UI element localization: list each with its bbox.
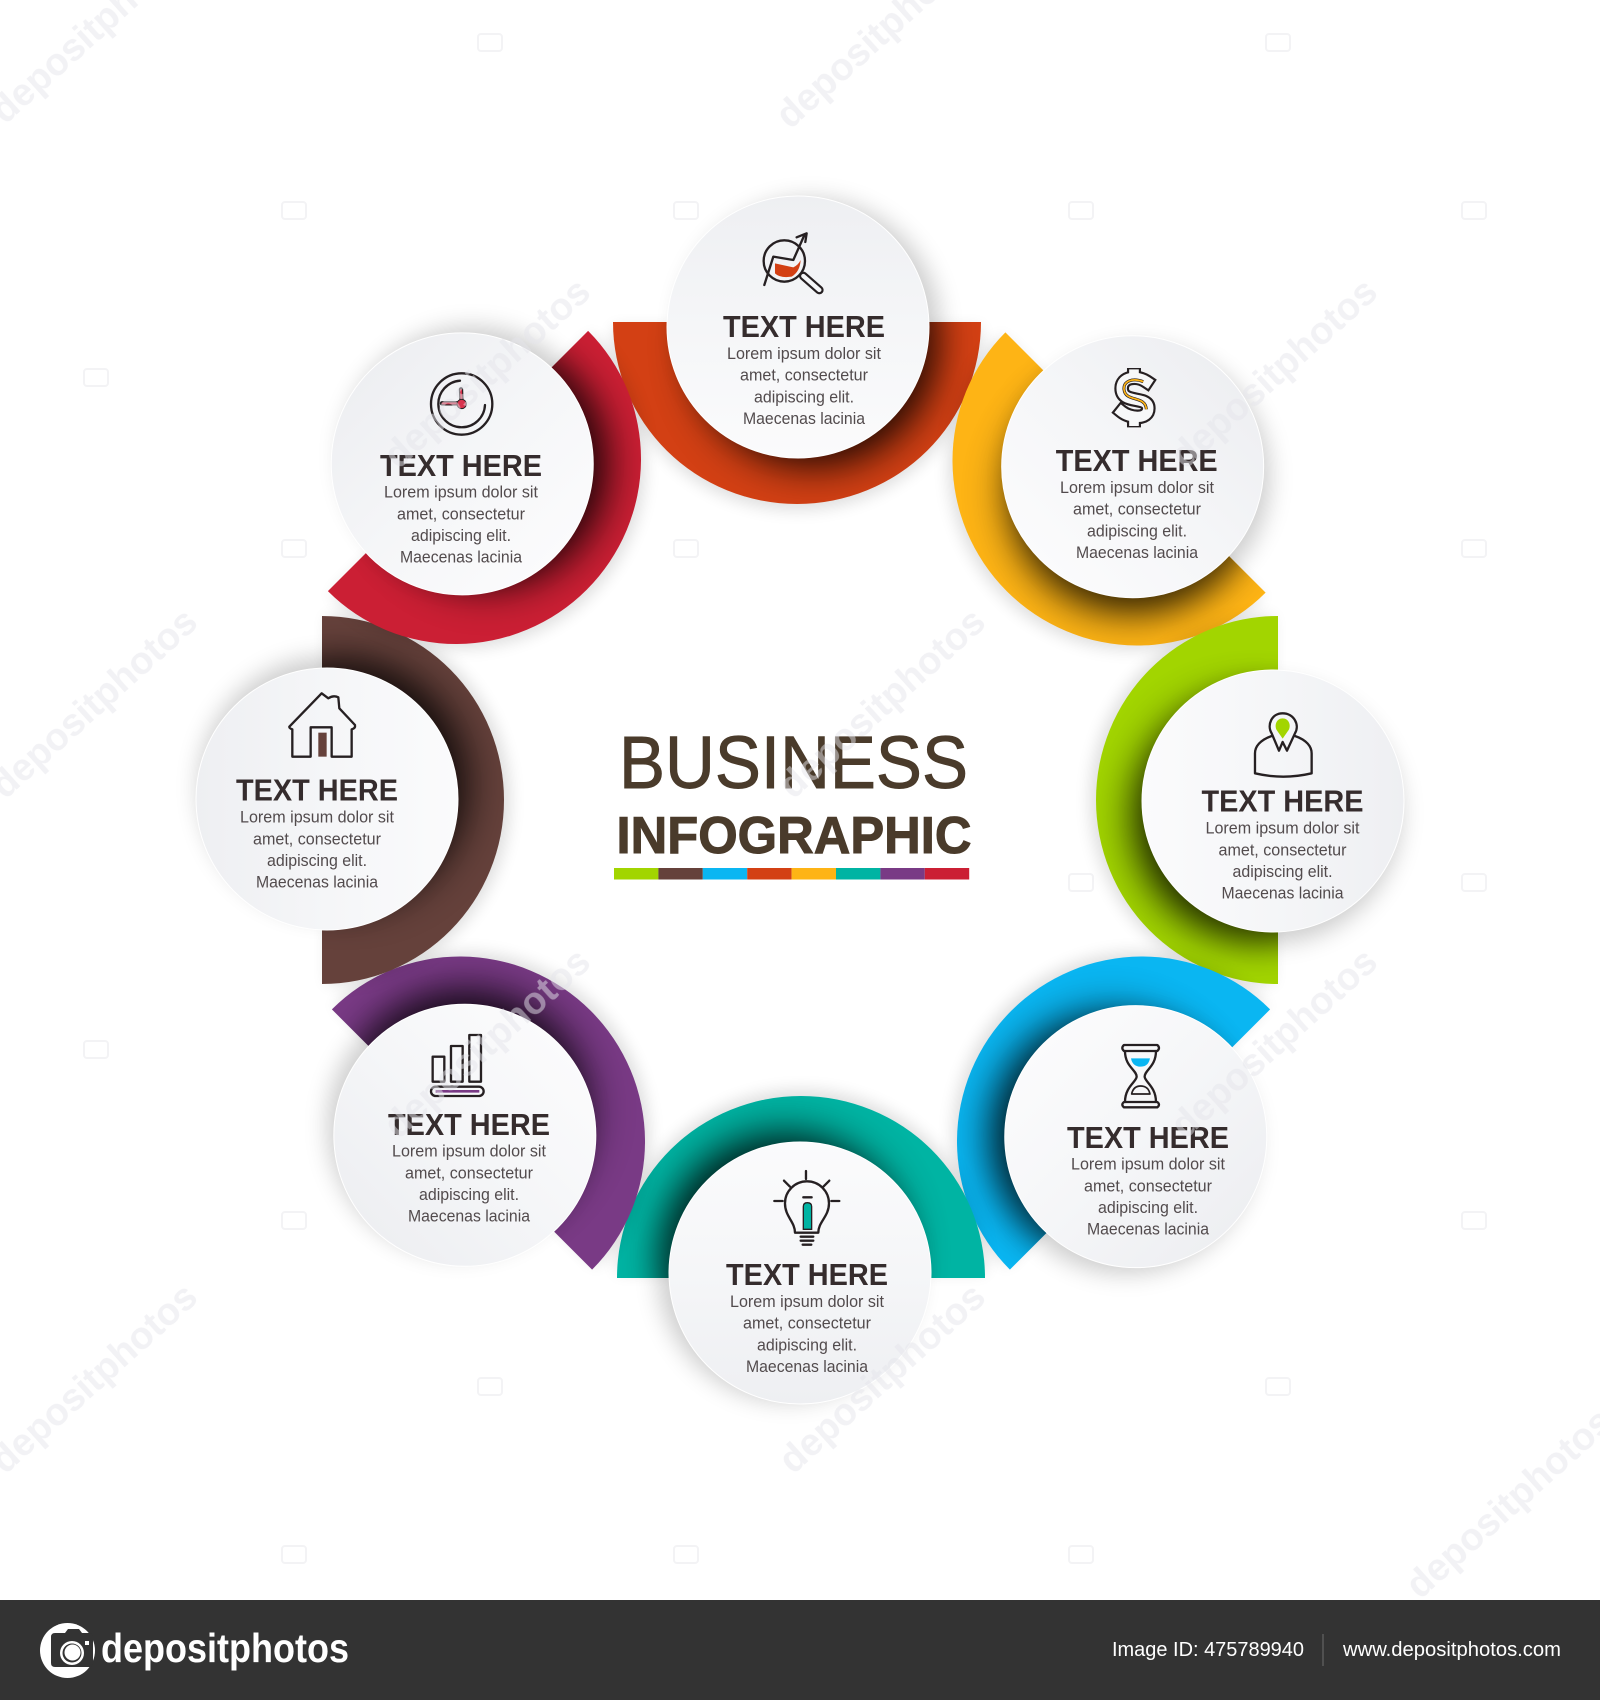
- ring segment: blue: [948, 948, 1270, 1284]
- ring segment: orange: [613, 196, 981, 510]
- title: business infographic: [616, 721, 972, 865]
- body text: Maecenas lacinia: [743, 409, 865, 428]
- title: business infographic: INFOGRAPHIC: [616, 807, 972, 865]
- body text: [384, 483, 538, 567]
- body text: [1071, 1155, 1225, 1239]
- body text: Maecenas lacinia: [256, 873, 378, 892]
- icon: light bulb: [774, 1171, 839, 1245]
- body text: Maecenas lacinia: [408, 1207, 530, 1226]
- watermark: background camera marks: [84, 34, 1486, 1563]
- ring segment: teal: [617, 1090, 985, 1404]
- heading: TEXT HERE: [1067, 1120, 1229, 1155]
- body text: amet, consectetur: [397, 504, 525, 523]
- colour legend bar: [614, 868, 969, 880]
- heading: TEXT HERE: [1202, 784, 1364, 819]
- ring segment: green: [1090, 616, 1404, 984]
- body text: Maecenas lacinia: [1222, 884, 1344, 903]
- body text: Lorem ipsum dolor sit: [384, 483, 538, 502]
- body text: Maecenas lacinia: [1087, 1220, 1209, 1239]
- panel: step 7 brown, house: [196, 616, 510, 984]
- body text: [1060, 478, 1214, 562]
- body text: amet, consectetur: [253, 829, 381, 848]
- panel: step 3 green, person: [1090, 616, 1404, 984]
- panel: step 1 orange, analysis: [613, 196, 981, 510]
- body text: adipiscing elit.: [1098, 1198, 1198, 1217]
- body text: adipiscing elit.: [1087, 521, 1187, 540]
- icon: hourglass: [1122, 1045, 1159, 1107]
- body text: amet, consectetur: [1218, 840, 1347, 859]
- body text: adipiscing elit.: [757, 1335, 857, 1354]
- watermark: diagonal stock text: depositphotos: [376, 270, 599, 477]
- body text: [730, 1292, 884, 1376]
- body text: [727, 344, 881, 428]
- body text: amet, consectetur: [740, 366, 868, 385]
- body text: Lorem ipsum dolor sit: [1071, 1155, 1225, 1174]
- heading: TEXT HERE: [723, 309, 885, 344]
- body text: amet, consectetur: [1084, 1176, 1212, 1195]
- image id: Image ID: 475789940: [1112, 1639, 1304, 1661]
- body text: amet, consectetur: [1073, 500, 1201, 519]
- ring segment: purple: [318, 948, 654, 1270]
- logo mark: [40, 1623, 95, 1678]
- watermark: diagonal stock text: depositphotos: [771, 600, 994, 807]
- body text: adipiscing elit.: [411, 526, 511, 545]
- body text: Lorem ipsum dolor sit: [730, 1292, 884, 1311]
- body text: adipiscing elit.: [267, 851, 367, 870]
- body text: amet, consectetur: [405, 1163, 533, 1182]
- icon: clock: [431, 373, 492, 435]
- heading: TEXT HERE: [1056, 443, 1218, 478]
- body text: Maecenas lacinia: [1076, 543, 1198, 562]
- watermark: diagonal stock text: depositphotos: [1163, 940, 1386, 1147]
- icon: dollar sign: [1122, 368, 1148, 427]
- panel: step 8 red, clock: [328, 316, 650, 653]
- body text: Maecenas lacinia: [746, 1357, 868, 1376]
- icon: person with pin: [1255, 713, 1312, 777]
- panel: step 6 purple, bar chart: [318, 948, 654, 1270]
- heading: TEXT HERE: [726, 1257, 888, 1292]
- body text: Lorem ipsum dolor sit: [727, 344, 881, 363]
- panel: step 2 yellow, money: [944, 332, 1280, 654]
- body text: Lorem ipsum dolor sit: [392, 1142, 546, 1161]
- body text: [1206, 819, 1360, 903]
- website url: www.depositphotos.com: [1342, 1639, 1561, 1661]
- ring segment: yellow: [944, 332, 1280, 654]
- watermark: diagonal stock text: depositphotos: [771, 1275, 994, 1482]
- heading: TEXT HERE: [380, 448, 542, 483]
- body text: Lorem ipsum dolor sit: [1206, 819, 1360, 838]
- watermark: diagonal stock text: depositphotos: [376, 940, 599, 1147]
- body text: adipiscing elit.: [419, 1185, 519, 1204]
- panel: step 4 blue, hourglass: [948, 948, 1270, 1284]
- ring segment: brown: [196, 616, 510, 984]
- heading: TEXT HERE: [388, 1107, 550, 1142]
- watermark: diagonal stock text: depositphotos: [1163, 270, 1386, 477]
- body text: amet, consectetur: [743, 1314, 871, 1333]
- icon: house: [289, 693, 355, 757]
- heading: TEXT HERE: [236, 773, 398, 808]
- body text: [240, 808, 394, 892]
- body text: adipiscing elit.: [754, 387, 854, 406]
- ring segment: red: [328, 316, 650, 653]
- body text: adipiscing elit.: [1232, 862, 1332, 881]
- panel: step 5 teal, light bulb: [617, 1090, 985, 1404]
- title: business infographic: BUSINESS: [619, 721, 968, 804]
- body text: Lorem ipsum dolor sit: [240, 808, 394, 827]
- icon: magnifier with chart: [764, 233, 819, 290]
- footer bar: [0, 1600, 1600, 1700]
- icon: bar chart: [431, 1035, 484, 1096]
- body text: [392, 1142, 546, 1226]
- body text: Lorem ipsum dolor sit: [1060, 478, 1214, 497]
- logo wordmark: depositphotos: [101, 1625, 349, 1671]
- body text: Maecenas lacinia: [400, 548, 522, 567]
